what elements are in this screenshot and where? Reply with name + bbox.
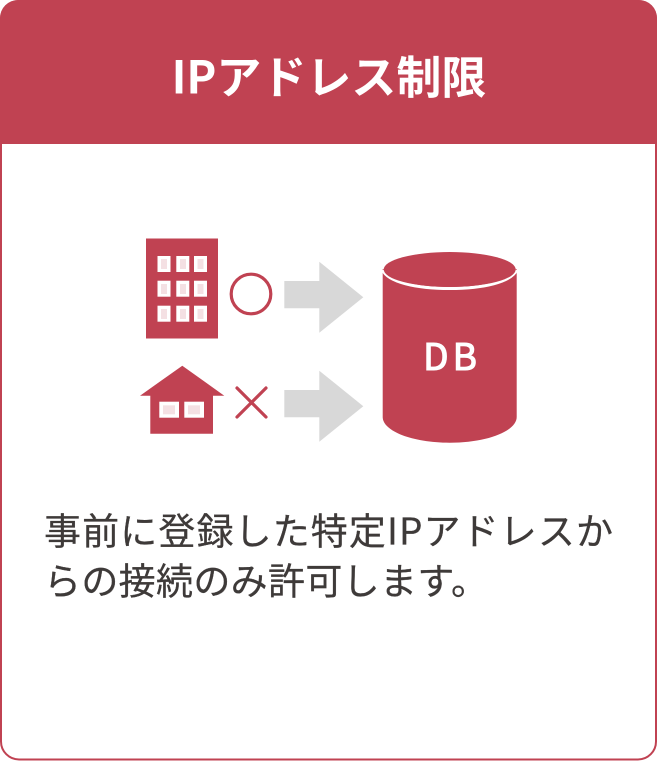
arrow: house to database [284, 371, 363, 442]
icon: office building [146, 238, 218, 338]
database label: DB [423, 327, 481, 381]
icon: circle mark [231, 274, 271, 314]
description text: 事前に登録した特定IPアドレスか [44, 502, 613, 556]
arrow: building to database [284, 262, 363, 333]
title: IPアドレス制限 [172, 42, 486, 106]
icon: database cylinder [383, 252, 517, 443]
icon: cross mark [237, 388, 266, 417]
header band [0, 0, 657, 144]
description text [44, 502, 613, 606]
icon: house [140, 366, 224, 434]
description text: らの接続のみ許可します。 [44, 552, 488, 606]
